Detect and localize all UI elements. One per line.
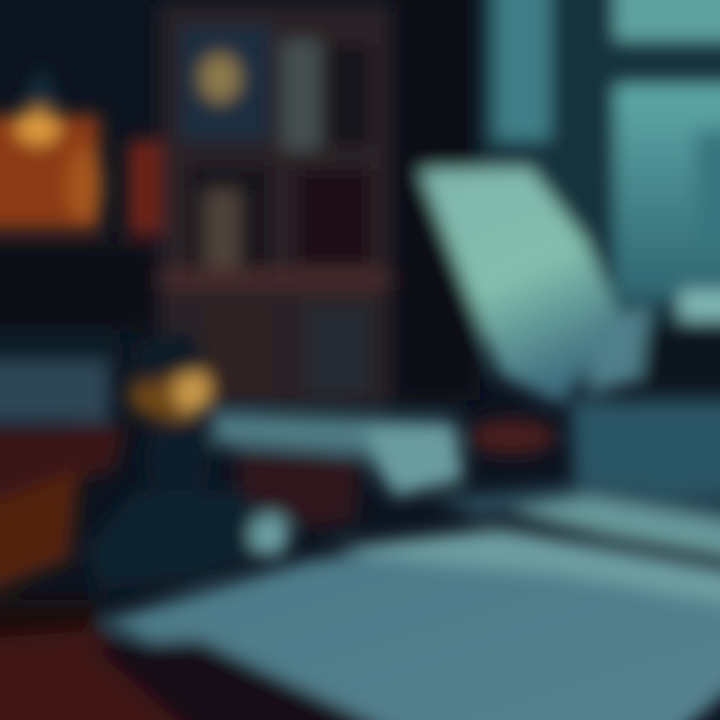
- window backdrop: [470, 0, 720, 340]
- teal book on desk: [210, 412, 465, 530]
- red shelf edge: [128, 140, 160, 235]
- shelf lamp glow in bookshelf: [200, 54, 240, 102]
- left wooden desk: [0, 630, 290, 720]
- dark wall between bookshelf and window: [395, 0, 480, 400]
- dark figurine base: [85, 490, 290, 590]
- papers on desk: [100, 484, 720, 720]
- right side dark object and mug: [570, 290, 720, 500]
- pale paper sheet: [420, 168, 625, 405]
- dark desk front edge: [90, 640, 430, 720]
- bookshelf: [160, 5, 390, 405]
- red-brown object on desk: [468, 419, 556, 455]
- glass object with amber highlight: [128, 330, 212, 498]
- left lower shelf and books: [0, 245, 155, 640]
- orange lamp glow: [0, 65, 103, 230]
